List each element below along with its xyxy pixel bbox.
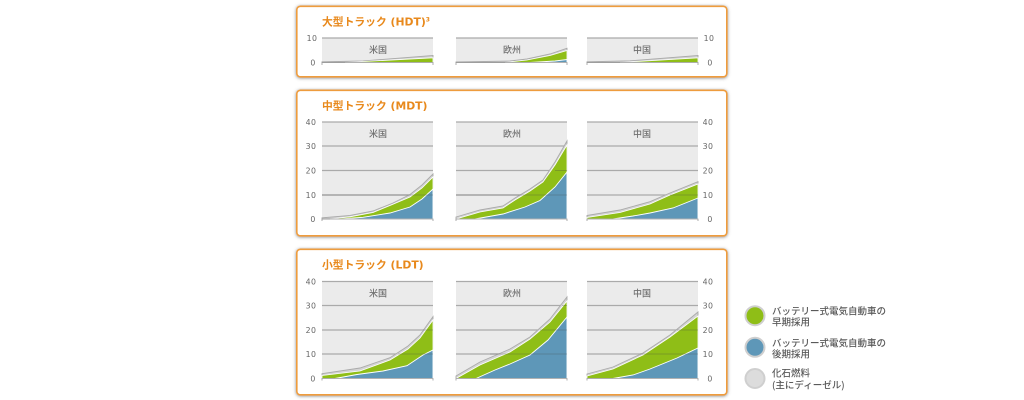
category label: 欧州: [503, 43, 521, 56]
axis labels: 40: [306, 118, 316, 127]
axis labels: 0: [707, 374, 713, 384]
axis labels: 10: [307, 34, 317, 43]
legend item: late-adopter BEV: [746, 336, 886, 360]
chart: LDT Europe: [456, 282, 567, 380]
chart: MDT Europe: [456, 122, 567, 221]
legend item: early-adopter BEV: バッテリー式電気自動車の: [772, 304, 886, 318]
panel: medium-duty trucks: [297, 90, 727, 236]
axis labels: 30: [703, 142, 713, 151]
panel: heavy-duty trucks: [297, 6, 727, 77]
axis labels: 10: [704, 34, 714, 43]
category label: 米国: [369, 43, 387, 56]
legend item: fossil fuel: 化石燃料: [772, 366, 811, 380]
axis labels: 20: [703, 166, 713, 176]
heading: HDT: 3: [426, 16, 430, 24]
axis labels: [306, 118, 713, 224]
axis labels: 20: [306, 326, 316, 335]
axis labels: [307, 34, 714, 68]
panel: light-duty trucks: [297, 249, 727, 395]
axis labels: 30: [703, 302, 713, 310]
axis labels: 10: [306, 350, 316, 359]
category label: 中国: [633, 286, 651, 300]
legend item: early-adopter BEV: [746, 304, 886, 328]
category label: 中国: [633, 127, 651, 140]
axis labels: 40: [703, 278, 713, 286]
category label: 米国: [369, 286, 387, 300]
axis labels: 0: [707, 58, 713, 68]
category label: 欧州: [503, 286, 521, 300]
legend item: fossil fuel: [746, 366, 845, 392]
axis labels: 40: [703, 118, 713, 127]
axis labels: 0: [310, 215, 316, 224]
axis labels: 10: [306, 191, 316, 200]
axis labels: [306, 278, 713, 384]
axis labels: 0: [310, 58, 316, 68]
chart: LDT USA: [322, 282, 433, 380]
heading: LDT: 小型トラック (LDT): [322, 258, 424, 272]
chart: HDT USA: [322, 38, 433, 65]
chart: LDT China: [587, 282, 698, 380]
legend item: late-adopter BEV: 後期採用: [772, 346, 810, 360]
heading: MDT: 中型トラック (MDT): [322, 98, 427, 112]
legend item: fossil fuel: (主にディーゼル): [772, 378, 845, 392]
chart: HDT Europe: [456, 38, 567, 65]
chart: MDT China: [587, 122, 698, 221]
axis labels: 10: [703, 350, 713, 359]
category label: 米国: [369, 127, 387, 140]
axis labels: 20: [306, 166, 316, 176]
axis labels: 10: [703, 191, 713, 200]
legend: [746, 304, 886, 392]
category label: 中国: [633, 43, 651, 56]
axis labels: 30: [306, 302, 316, 310]
axis labels: 20: [703, 326, 713, 335]
heading: HDT: 大型トラック (HDT): [322, 16, 426, 28]
axis labels: 0: [707, 215, 713, 224]
axis labels: 30: [306, 142, 316, 151]
chart: HDT China: [587, 38, 698, 65]
chart: MDT USA: [322, 122, 433, 221]
axis labels: 0: [310, 374, 316, 384]
category label: 欧州: [503, 127, 521, 140]
legend item: late-adopter BEV: バッテリー式電気自動車の: [772, 336, 886, 350]
legend item: early-adopter BEV: 早期採用: [772, 314, 810, 328]
axis labels: 40: [306, 278, 316, 286]
